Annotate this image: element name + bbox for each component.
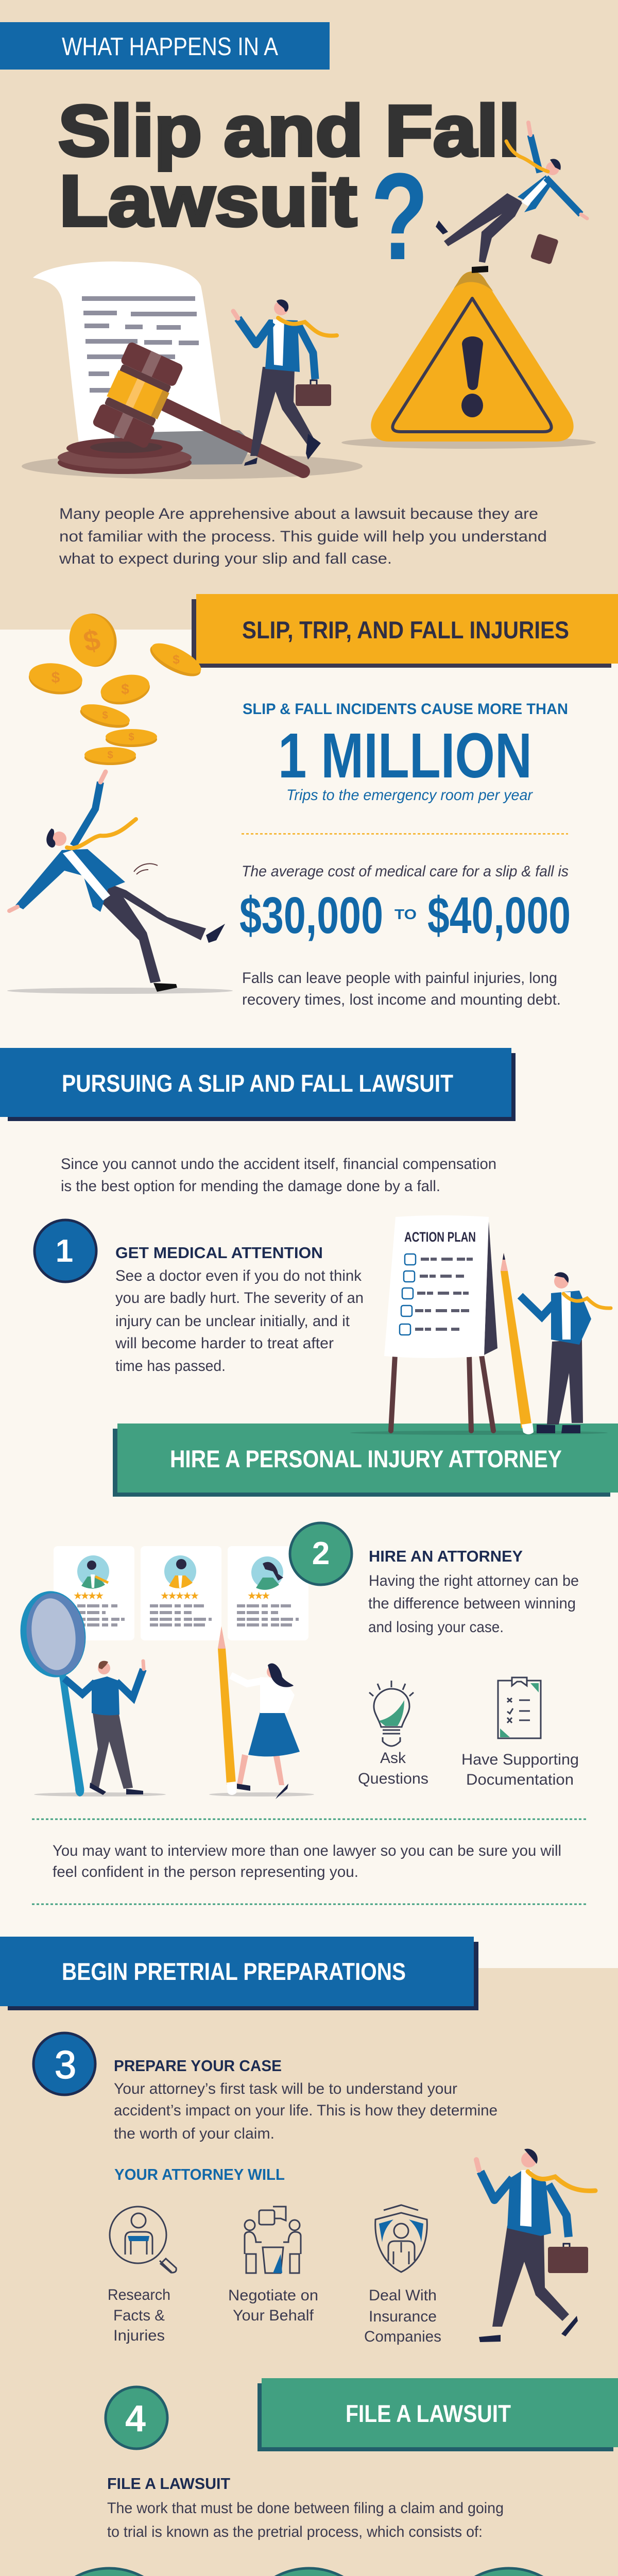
step 3 text: accident’s impact on your life. This is how they determine xyxy=(114,2102,497,2119)
icon: light bulb xyxy=(369,1681,414,1746)
blue banner: begin pretrial preparations xyxy=(0,1937,478,2010)
blue banner: pursuing a slip and fall lawsuit xyxy=(0,1048,516,1121)
step 4 text xyxy=(107,2475,504,2540)
illustration: gavel xyxy=(22,341,363,479)
attorney review cards: ★★★★ xyxy=(73,1589,104,1602)
step 2 badge xyxy=(290,1523,352,1585)
step 3 badge xyxy=(33,2033,95,2095)
step 4 text: The work that must be done between filing a claim and going xyxy=(107,2500,504,2517)
illustration: man falling off triangle xyxy=(436,123,587,273)
step 3 badge: 3 xyxy=(55,2043,76,2087)
blue banner: begin pretrial preparations: BEGIN PRETRIAL PREPARATIONS xyxy=(62,1958,406,1985)
intro text: not familiar with the process. This guide will help you understand xyxy=(59,528,547,545)
illustration: man with briefcase xyxy=(476,2149,595,2342)
illustration: falling coins: $ xyxy=(121,681,129,697)
step 1 badge xyxy=(35,1220,96,1282)
pretrial phases flow xyxy=(39,2568,579,2576)
step 3 text: Your attorney’s first task will be to understand your xyxy=(114,2080,457,2097)
illustration: falling coins: $ xyxy=(52,669,60,686)
statistic: 1 million: SLIP & FALL INCIDENTS CAUSE MORE THAN xyxy=(243,701,568,718)
phase: complaint and answer xyxy=(39,2568,180,2576)
icon labels: Questions xyxy=(358,1770,428,1787)
text: falls consequences xyxy=(242,970,561,1008)
text: financial compensation: is the best option for mending the damage done by a fall. xyxy=(61,1178,440,1195)
step 1 text: injury can be unclear initially, and it xyxy=(115,1313,350,1330)
icon labels xyxy=(358,1750,579,1788)
yellow banner: slip, trip, and fall injuries: SLIP, TRIP, AND FALL INJURIES xyxy=(242,616,569,643)
attorney task labels: Companies xyxy=(364,2328,441,2345)
icon labels: Ask xyxy=(380,1750,406,1767)
yellow banner: slip, trip, and fall injuries xyxy=(192,594,618,668)
icon labels: Have Supporting xyxy=(461,1751,579,1768)
attorney task labels: Negotiate on xyxy=(228,2287,318,2304)
illustration: action plan board: ACTION PLAN xyxy=(404,1229,476,1245)
step 2 text: the difference between winning xyxy=(368,1595,576,1612)
top banner: what happens in a: WHAT HAPPENS IN A xyxy=(62,33,278,61)
title: Lawsuit xyxy=(59,160,357,241)
statistic: medical cost: $40,000 xyxy=(427,887,571,944)
statistic: medical cost: The average cost of medical care for a slip & fall is xyxy=(242,863,569,880)
attorney review cards xyxy=(54,1546,308,1640)
step 3 text xyxy=(114,2057,497,2142)
statistic: medical cost: $30,000 xyxy=(239,887,383,944)
step 3 text: PREPARE YOUR CASE xyxy=(114,2057,282,2075)
step 2 text: and losing your case. xyxy=(368,1619,504,1636)
step 2 text xyxy=(368,1547,579,1636)
step 1 text: See a doctor even if you do not think xyxy=(115,1267,362,1284)
step 1 text xyxy=(115,1244,364,1375)
illustration: falling coins: $ xyxy=(80,623,103,658)
statistic: 1 million: 1 MILLION xyxy=(278,721,532,791)
statistic: medical cost: TO xyxy=(394,906,417,922)
illustration: woman with pencil xyxy=(209,1626,314,1799)
step 1 text: time has passed. xyxy=(115,1358,226,1375)
attorney task labels: Research xyxy=(108,2286,170,2303)
attorney task labels: Insurance xyxy=(369,2308,437,2325)
statistic: 1 million: Trips to the emergency room per year xyxy=(286,787,533,804)
illustration: man with pencil xyxy=(501,1253,611,1434)
attorney review cards: ★★★★★ xyxy=(160,1589,199,1602)
heading: your attorney will: YOUR ATTORNEY WILL xyxy=(114,2165,285,2183)
attorney task labels: Injuries xyxy=(113,2327,165,2344)
text: financial compensation: Since you cannot undo the accident itself, financial compensation xyxy=(61,1156,496,1173)
text: falls consequences: recovery times, lost income and mounting debt. xyxy=(242,991,561,1008)
green banner: hire a personal injury attorney xyxy=(113,1423,618,1497)
step 4 badge xyxy=(106,2387,167,2449)
step 2 text: Having the right attorney can be xyxy=(369,1572,579,1589)
attorney review cards: ★★★ xyxy=(247,1589,270,1602)
attorney task labels xyxy=(108,2286,441,2345)
icon: research magnifier xyxy=(110,2207,176,2273)
phase: discovery xyxy=(238,2568,380,2576)
step 2 badge: 2 xyxy=(312,1536,330,1571)
step 1 text: you are badly hurt. The severity of an xyxy=(115,1290,364,1307)
green banner: hire a personal injury attorney: HIRE A PERSONAL INJURY ATTORNEY xyxy=(170,1445,562,1472)
icon: negotiate xyxy=(245,2207,301,2273)
attorney task labels: Your Behalf xyxy=(233,2307,314,2324)
illustration: falling coins: $ xyxy=(102,710,108,721)
illustration: falling coins: $ xyxy=(107,750,113,761)
icon: insurance shield xyxy=(375,2205,427,2272)
green banner: file a lawsuit xyxy=(258,2378,618,2451)
step 1 badge: 1 xyxy=(56,1233,73,1269)
illustration: falling coins: $ xyxy=(128,732,134,743)
statistic: 1 million xyxy=(243,701,568,804)
text: falls consequences: Falls can leave people with painful injuries, long xyxy=(242,970,557,987)
step 1 text: will become harder to treat after xyxy=(115,1335,334,1352)
illustration: big falling man xyxy=(7,772,233,994)
icon: clipboard xyxy=(498,1677,541,1738)
title: Slip and Fall xyxy=(58,90,520,171)
illustration: falling coins xyxy=(27,609,205,765)
phase: motions xyxy=(438,2568,579,2576)
illustration: warning triangle xyxy=(341,272,596,449)
text: interview more than one lawyer: You may want to interview more than one lawyer so you can be sure you will xyxy=(53,1842,561,1859)
intro text: what to expect during your slip and fall case. xyxy=(59,550,392,567)
green banner: file a lawsuit: FILE A LAWSUIT xyxy=(346,2400,511,2427)
text: interview more than one lawyer xyxy=(53,1842,561,1880)
step 4 badge: 4 xyxy=(125,2398,146,2439)
illustration: document xyxy=(33,261,222,443)
blue banner: pursuing a slip and fall lawsuit: PURSUING A SLIP AND FALL LAWSUIT xyxy=(62,1070,453,1097)
step 1 text: GET MEDICAL ATTENTION xyxy=(115,1244,323,1262)
text: financial compensation xyxy=(61,1156,496,1195)
top banner: what happens in a xyxy=(0,22,330,70)
illustration: falling coins: $ xyxy=(173,653,180,667)
statistic: medical cost xyxy=(239,863,571,944)
attorney task labels: Deal With xyxy=(369,2287,437,2304)
illustration: walking man xyxy=(233,299,337,466)
illustration: man with magnifying glass xyxy=(15,1587,166,1797)
text: interview more than one lawyer: feel confident in the person representing you. xyxy=(53,1863,358,1880)
intro text: Many people Are apprehensive about a lawsuit because they are xyxy=(59,505,538,522)
step 4 text: FILE A LAWSUIT xyxy=(107,2475,230,2493)
step 3 text: the worth of your claim. xyxy=(114,2125,274,2142)
title: ? xyxy=(371,147,428,285)
illustration: action plan board xyxy=(384,1215,497,1431)
attorney task labels: Facts & xyxy=(113,2307,165,2324)
title xyxy=(58,90,520,285)
step 4 text: to trial is known as the pretrial process, which consists of: xyxy=(107,2523,483,2540)
intro text xyxy=(59,505,547,567)
step 2 text: HIRE AN ATTORNEY xyxy=(369,1547,523,1565)
icon labels: Documentation xyxy=(466,1771,574,1788)
